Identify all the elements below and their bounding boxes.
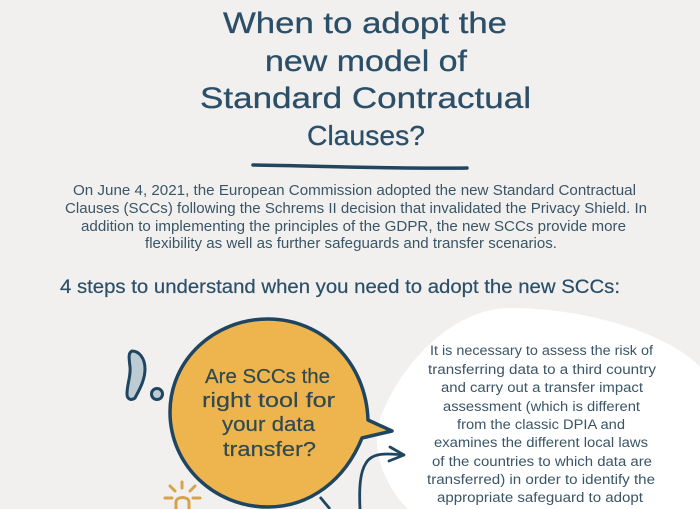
bubble text: your data [222, 414, 316, 436]
intro paragraph [65, 183, 647, 252]
explanation text: of the countries to which data are [432, 454, 652, 469]
title: Standard Contractual [200, 82, 531, 115]
title [200, 7, 531, 151]
title: Clauses? [307, 120, 425, 151]
intro paragraph: flexibility as well as further safeguards and transfer scenarios. [145, 236, 557, 252]
explanation text: It is necessary to assess the risk of [430, 343, 653, 358]
intro paragraph: On June 4, 2021, the European Commission adopted the new Standard Contractual [73, 183, 636, 199]
bubble text [202, 366, 335, 461]
steps heading: 4 steps to understand when you need to adopt the new SCCs: [60, 277, 620, 298]
explanation text [427, 343, 656, 505]
intro paragraph: addition to implementing the principles of the GDPR, the new SCCs provide more [81, 219, 626, 235]
bubble text: Are SCCs the [205, 366, 330, 388]
icon: step number 1 [127, 351, 162, 400]
intro paragraph: Clauses (SCCs) following the Schrems II decision that invalidated the Privacy Shield. In [65, 201, 647, 217]
explanation text: transferred) in order to identify the [427, 472, 655, 487]
panel: white explanation blob [377, 308, 700, 509]
explanation text: and carry out a transfer impact [441, 380, 643, 395]
explanation text: examines the different local laws [434, 435, 648, 450]
bubble text: right tool for [202, 390, 335, 412]
icon: lightbulb [165, 482, 200, 509]
explanation text: appropriate safeguard to adopt [437, 490, 643, 505]
title underline [253, 165, 467, 168]
connector line below bubble [320, 497, 330, 509]
explanation text: transferring data to a third country [428, 362, 656, 377]
explanation text: from the classic DPIA and [457, 417, 625, 432]
arrow to explanation [360, 447, 404, 509]
bubble text: transfer? [223, 439, 316, 461]
speech bubble: question [170, 319, 392, 507]
title: When to adopt the [223, 7, 507, 40]
explanation text: assessment (which is different [443, 399, 640, 414]
title: new model of [265, 45, 468, 78]
